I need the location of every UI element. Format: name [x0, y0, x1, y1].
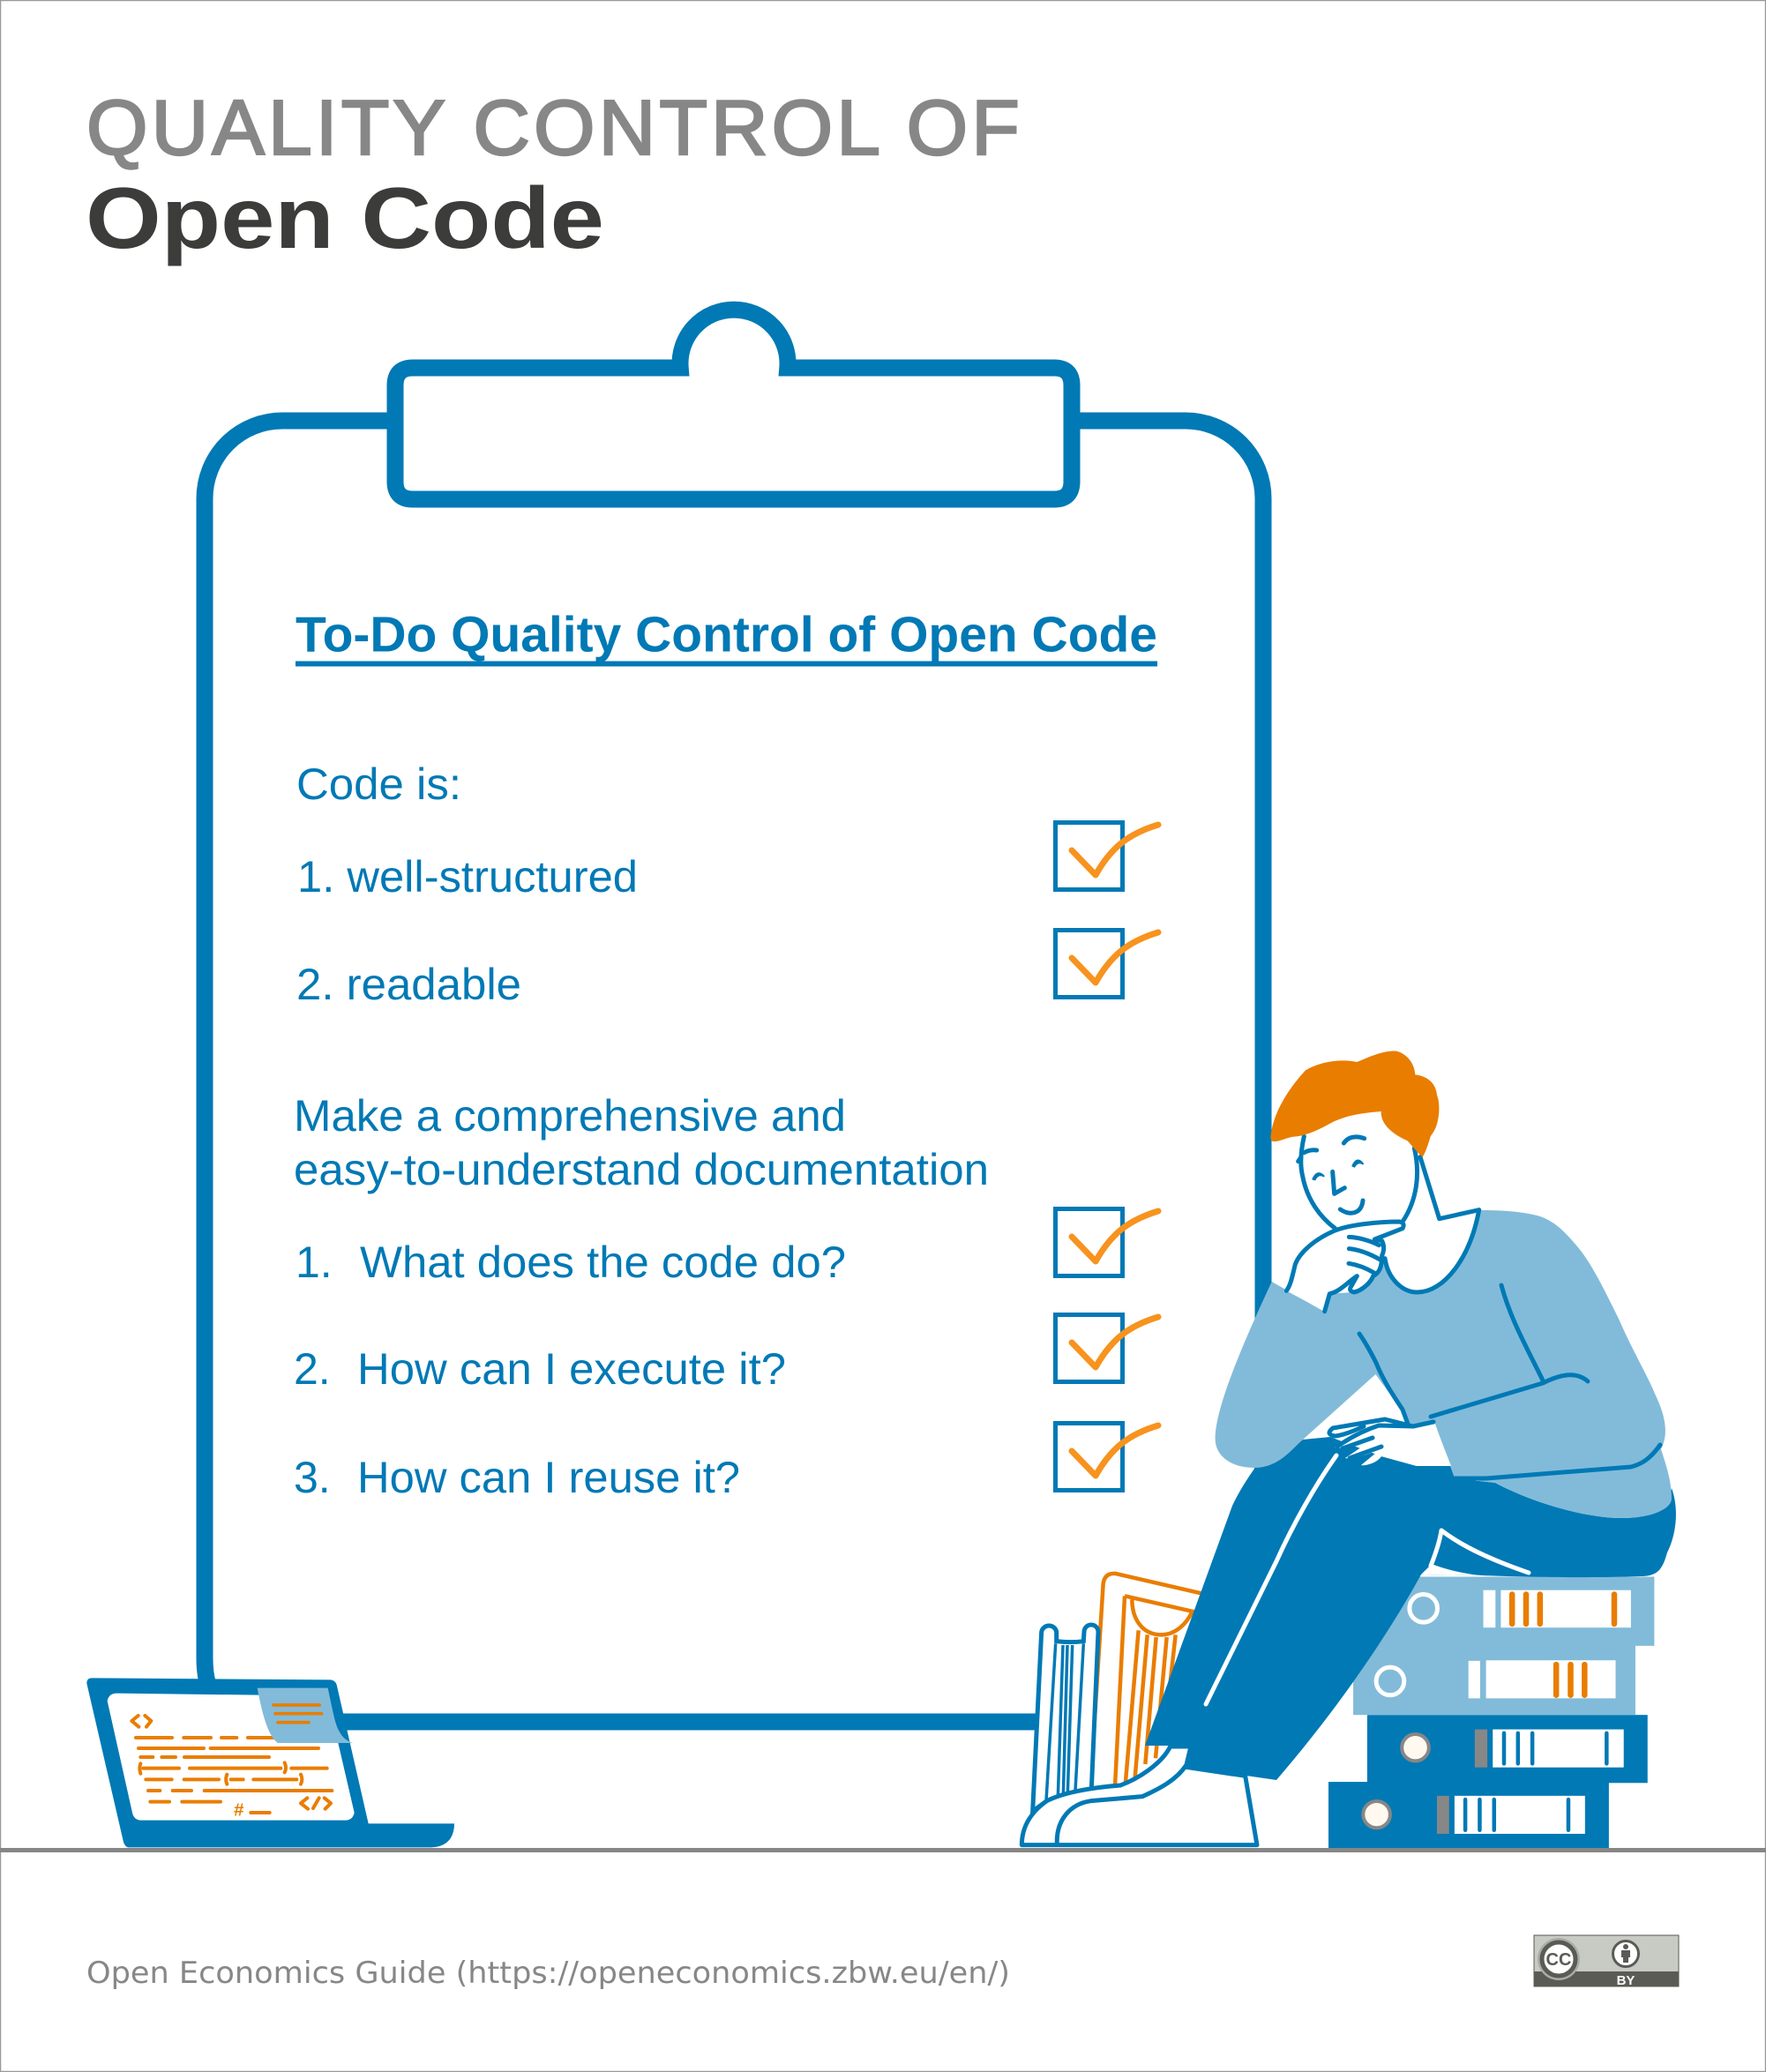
- checkboxes with ticks: [1055, 822, 1158, 1491]
- checkbox 4: [1055, 1314, 1158, 1381]
- documentation criteria text: [294, 1091, 989, 1502]
- license badge: CC BY: BY: [1617, 1973, 1635, 1988]
- binder 4: [1328, 1782, 1609, 1851]
- blue book: [1033, 1625, 1098, 1811]
- face and neck lines: [1298, 1136, 1479, 1292]
- license badge: CC BY: [1534, 1935, 1679, 1988]
- clipboard outline: [205, 310, 1263, 1722]
- code criteria text: [296, 759, 638, 1009]
- person: trousers: [1145, 1437, 1676, 1780]
- documentation criteria text: Make a comprehensive and: [294, 1091, 846, 1141]
- laptop: [86, 1678, 454, 1847]
- binders stack: [1328, 1577, 1654, 1851]
- checkbox 2: [1055, 930, 1158, 997]
- checklist heading: To-Do Quality Control of Open Code: [296, 607, 1157, 663]
- laptop screen: [108, 1694, 355, 1821]
- checkbox 1: [1055, 822, 1158, 889]
- ground line: [0, 1848, 1766, 1852]
- person: head and chin hand: [1270, 1051, 1479, 1312]
- title: Open Code: [86, 169, 604, 266]
- binder 1: [1357, 1577, 1654, 1646]
- person: sweater: [1216, 1210, 1672, 1518]
- books and shoe: [1021, 1574, 1257, 1845]
- code lines: [131, 1716, 332, 1821]
- code criteria text: 2. readable: [296, 960, 521, 1009]
- checkbox 3: [1055, 1208, 1158, 1275]
- code criteria text: 1. well-structured: [297, 852, 638, 901]
- hair: [1270, 1051, 1439, 1157]
- documentation criteria text: 3.: [294, 1453, 331, 1502]
- binder 3: [1367, 1715, 1648, 1783]
- checkbox 5: [1055, 1424, 1158, 1491]
- title: [86, 84, 1023, 266]
- sticky note: [258, 1688, 354, 1743]
- documentation criteria text: 2.: [294, 1344, 331, 1394]
- binder 2: [1353, 1645, 1635, 1715]
- shoe: [1021, 1747, 1257, 1845]
- documentation criteria text: 1.: [296, 1238, 333, 1287]
- footer source text: Open Economics Guide (https://openeconomics.zbw.eu/en/): [86, 1956, 1010, 1991]
- code lines: #: [234, 1800, 244, 1821]
- documentation criteria text: How can I execute it?: [357, 1344, 786, 1394]
- orange book: [1090, 1574, 1202, 1789]
- chin hand: [1286, 1222, 1403, 1312]
- license badge: CC BY: CC: [1546, 1950, 1571, 1970]
- person: hand on knee: [1329, 1419, 1451, 1466]
- title: QUALITY CONTROL OF: [86, 84, 1023, 171]
- documentation criteria text: easy-to-understand documentation: [294, 1145, 989, 1194]
- code criteria text: Code is:: [296, 759, 461, 809]
- documentation criteria text: What does the code do?: [360, 1238, 846, 1287]
- clipboard clip: [395, 310, 1072, 499]
- documentation criteria text: How can I reuse it?: [357, 1453, 740, 1502]
